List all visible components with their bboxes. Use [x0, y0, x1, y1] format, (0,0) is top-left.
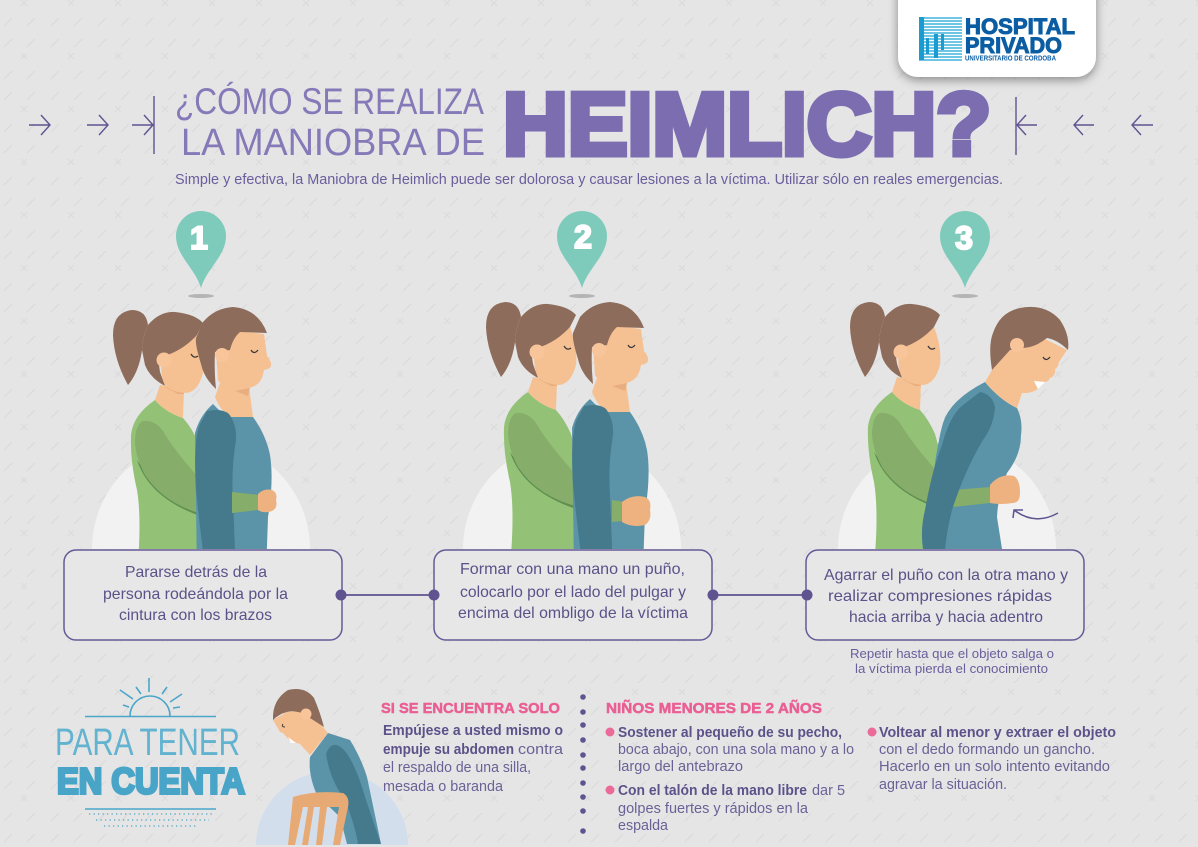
- ninos menores de 2 anos: con el dedo formando un gancho.: [879, 742, 1095, 758]
- ninos menores de 2 anos: Voltear al menor y extraer el objeto: [879, 725, 1116, 741]
- si se encuentra solo: el respaldo de una silla,: [383, 760, 531, 776]
- step 2 box: Formar con una mano un puño,: [460, 561, 685, 578]
- ninos menores de 2 anos: NIÑOS MENORES DE 2 AÑOS: [606, 699, 822, 717]
- step 3 box: [806, 550, 1084, 640]
- ninos menores de 2 anos: largo del antebrazo: [618, 759, 743, 775]
- repeat note: Repetir hasta que el objeto salga o: [850, 647, 1054, 661]
- logo mark: [919, 17, 962, 60]
- connector lines: [342, 594, 807, 596]
- step 2 figures: [486, 302, 650, 570]
- compression arrow: [1013, 510, 1058, 519]
- step 3 box: hacia arriba y hacia adentro: [849, 609, 1043, 626]
- title: LA MANIOBRA DE: [181, 122, 485, 164]
- logo text: PRIVADO: [965, 33, 1062, 58]
- logo text: UNIVERSITARIO DE CORDOBA: [965, 56, 1056, 62]
- pin 2: 2: [574, 219, 592, 255]
- ninos menores de 2 anos: Sostener al pequeño de su pecho,: [618, 725, 842, 741]
- ninos menores de 2 anos: Hacerlo en un solo intento evitando: [879, 759, 1110, 775]
- repeat note: [850, 647, 1054, 676]
- right header arrows: [1016, 97, 1153, 155]
- title: ¿CÓMO SE REALIZA: [175, 81, 484, 122]
- step 3 figures: [850, 302, 1068, 567]
- step 1 box: Pararse detrás de la: [125, 564, 267, 581]
- step 1 backdrop dome: [92, 440, 310, 549]
- si se encuentra solo: contra: [518, 742, 564, 758]
- si se encuentra solo: Empújese a usted mismo o: [383, 723, 563, 739]
- ninos menores de 2 anos: boca abajo, con una sola mano y a lo: [618, 742, 854, 758]
- para tener en cuenta badge: PARA TENER: [55, 722, 240, 764]
- title: [175, 74, 991, 174]
- para tener en cuenta badge: [55, 678, 245, 826]
- step 3 box: Agarrar el puño con la otra mano y: [824, 567, 1068, 584]
- si se encuentra solo: SI SE ENCUENTRA SOLO: [381, 701, 560, 717]
- repeat note: la víctima pierda el conocimiento: [855, 662, 1048, 676]
- ninos menores de 2 anos: dar 5: [812, 783, 845, 799]
- step 2 box: colocarlo por el lado del pulgar y: [460, 584, 686, 601]
- pin 3: [940, 211, 990, 298]
- logo text: [965, 14, 1075, 62]
- hospital logo card: [898, 0, 1096, 77]
- step 3 box: realizar compresiones rápidas: [828, 588, 1052, 605]
- subtitle: Simple y efectiva, la Maniobra de Heimlich puede ser dolorosa y causar lesiones a la víctima. Utilizar sólo en reales emergencias.: [175, 171, 1003, 188]
- step 2 box: [434, 550, 712, 640]
- chair: [288, 792, 348, 845]
- step 1 box: [64, 550, 342, 640]
- step 3 backdrop dome: [838, 440, 1056, 549]
- icon: sun: [85, 678, 216, 716]
- ninos menores de 2 anos: [606, 699, 1116, 834]
- self-help dome: [256, 771, 408, 845]
- pin 1: [176, 211, 226, 298]
- pin 1: 1: [190, 220, 208, 256]
- dotted divider: [580, 694, 586, 834]
- para tener en cuenta badge: EN CUENTA: [57, 760, 245, 802]
- ninos menores de 2 anos: Con el talón de la mano libre: [618, 783, 807, 799]
- connector dots: [336, 590, 812, 600]
- step 2 backdrop dome: [463, 440, 681, 549]
- title: HEIMLICH?: [503, 74, 991, 174]
- logo text: HOSPITAL: [965, 14, 1075, 39]
- si se encuentra solo: mesada o baranda: [383, 779, 504, 795]
- ninos menores de 2 anos: golpes fuertes y rápidos en la: [618, 801, 809, 817]
- pin 2: [557, 211, 607, 298]
- figure: man leaning on chair: [273, 689, 381, 845]
- bent man: [922, 307, 1068, 549]
- step 1 box: persona rodeándola por la: [103, 586, 288, 603]
- si se encuentra solo: [381, 701, 564, 795]
- ninos menores de 2 anos: espalda: [618, 818, 669, 834]
- ninos menores de 2 anos: agravar la situación.: [879, 777, 1007, 793]
- left header arrows: [29, 96, 154, 154]
- step 2 box: encima del ombligo de la víctima: [458, 605, 688, 622]
- pin 3: 3: [955, 220, 973, 256]
- step 1 box: cintura con los brazos: [119, 607, 272, 624]
- step 1 figures: [113, 307, 276, 575]
- si se encuentra solo: empuje su abdomen: [383, 742, 514, 758]
